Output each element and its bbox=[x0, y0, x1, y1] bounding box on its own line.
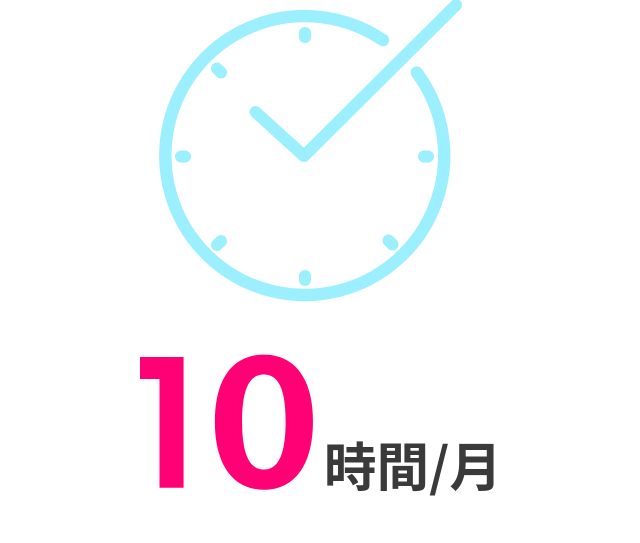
clock face ring bbox=[165, 16, 444, 295]
digit 1: 1 bbox=[96, 338, 236, 518]
icon: clock with check mark bbox=[165, 5, 456, 295]
hour ticks bbox=[181, 33, 428, 280]
digit 1 bbox=[140, 357, 184, 488]
infographic: clock icon with monthly hours bbox=[140, 0, 494, 496]
check mark bbox=[256, 5, 456, 156]
digit 0: 0 bbox=[206, 283, 322, 538]
unit: hours per month: 時間/月 bbox=[324, 426, 502, 502]
big number: 10 bbox=[140, 354, 313, 490]
